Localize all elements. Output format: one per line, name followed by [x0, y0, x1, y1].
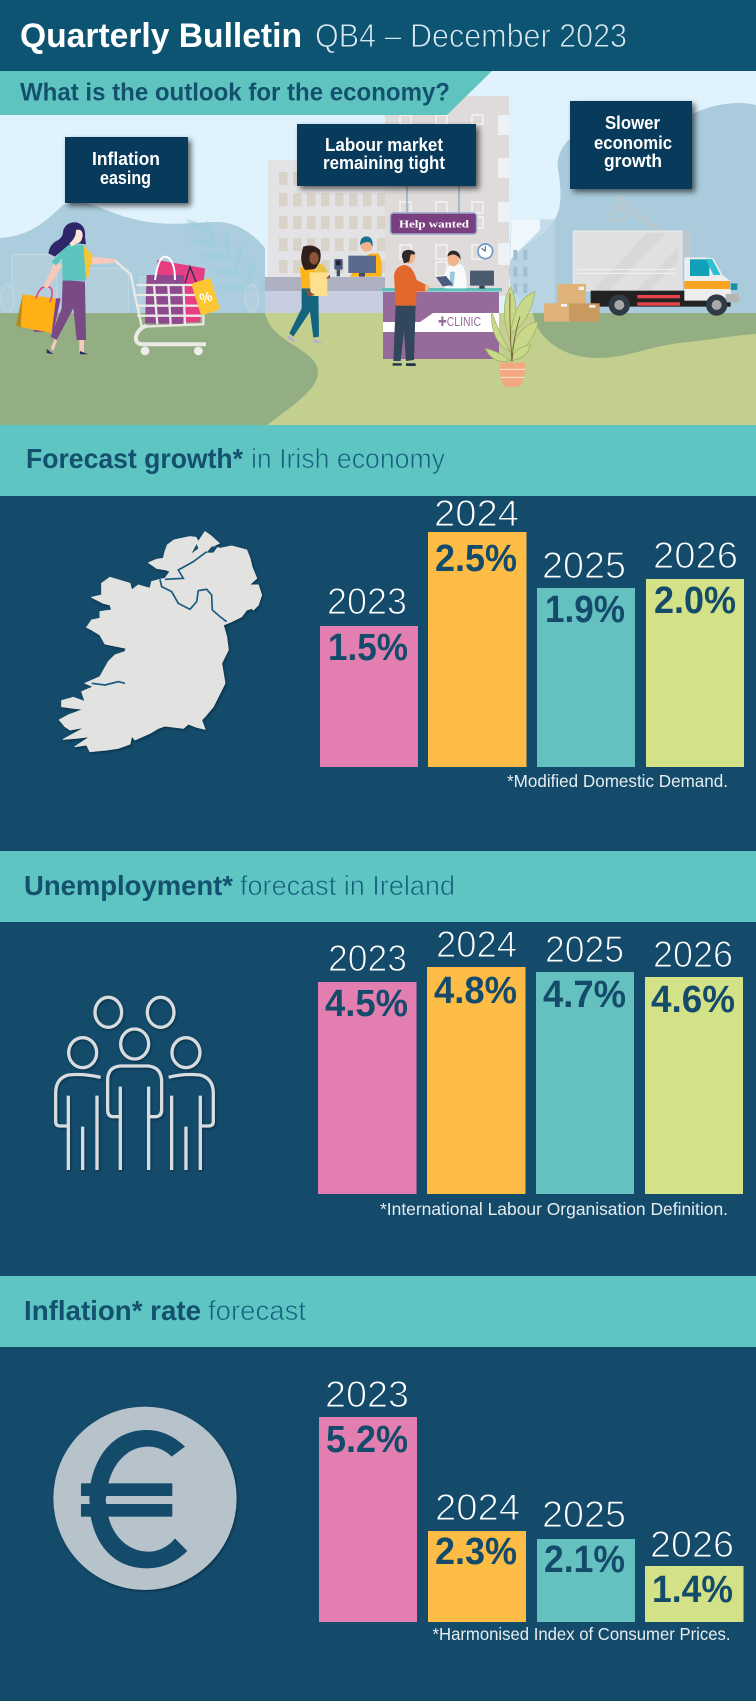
bar 2025 — [536, 929, 634, 1194]
icon: map of Ireland — [59, 532, 262, 752]
crane — [612, 195, 660, 231]
doctor and screen — [436, 244, 494, 289]
bar 2024 — [427, 924, 526, 1194]
bar chart: inflation — [319, 1374, 744, 1622]
bar 2024: 2.5% — [435, 538, 517, 580]
shopping trolley — [115, 257, 220, 355]
callout: inflation easing: Inflation — [92, 148, 160, 169]
help wanted sign: Help wanted — [399, 220, 469, 230]
bar 2024 — [428, 1487, 526, 1622]
callout: inflation easing — [65, 137, 188, 203]
woman with grocery bag — [287, 246, 330, 343]
help wanted sign — [390, 213, 476, 234]
background building left — [268, 160, 385, 285]
faint building right — [510, 219, 555, 313]
section heading — [0, 851, 756, 922]
section heading: in Irish economy — [251, 443, 445, 474]
bar chart: unemployment — [318, 924, 743, 1194]
shop counter — [258, 277, 385, 339]
bar 2026: 2026 — [653, 535, 738, 576]
footnote: *Modified Domestic Demand. — [507, 771, 728, 791]
bar 2023: 2023 — [327, 581, 407, 622]
man at clinic — [393, 250, 430, 366]
bar 2025 — [537, 545, 635, 767]
section heading: forecast in Ireland — [240, 870, 455, 901]
callout: slower growth: economic — [594, 132, 672, 153]
bar 2023: 2023 — [328, 938, 407, 979]
bar 2026: 2026 — [653, 934, 733, 975]
bar 2025: 1.9% — [545, 589, 625, 631]
subtitle: QB4 – December 2023 — [315, 17, 627, 54]
footnote: *International Labour Organisation Definition. — [380, 1199, 728, 1219]
bar 2025: 2025 — [542, 1494, 626, 1535]
section heading — [0, 1276, 756, 1347]
section heading — [0, 425, 756, 496]
section heading: Unemployment* — [24, 870, 233, 901]
woman shopper — [16, 222, 115, 354]
bar 2023 — [319, 1374, 417, 1622]
bar 2023 — [318, 938, 416, 1194]
hanging wires — [407, 186, 459, 213]
bar 2023: 1.5% — [328, 627, 408, 669]
icon: euro coin — [53, 1407, 237, 1590]
bar 2025: 2.1% — [544, 1539, 625, 1581]
bar 2026 — [645, 1524, 744, 1622]
bar 2024: 2.3% — [435, 1531, 517, 1573]
section heading: Forecast growth* — [26, 443, 243, 474]
clinic sign text: ✚CLINIC — [438, 314, 481, 329]
clinic reception desk — [382, 288, 502, 359]
potted plant — [485, 287, 538, 387]
panel: forecast growth — [0, 425, 756, 791]
panel: header — [0, 0, 756, 71]
outlook banner — [0, 71, 492, 115]
callout: slower growth — [570, 101, 692, 189]
bar 2023: 4.5% — [325, 983, 408, 1025]
bar 2026: 1.4% — [652, 1569, 733, 1611]
bar 2024: 2024 — [436, 924, 517, 965]
callout: labour market: remaining tight — [323, 152, 445, 173]
discount tag: % — [198, 288, 215, 307]
footnote: *Harmonised Index of Consumer Prices. — [432, 1624, 730, 1644]
bar 2026: 2026 — [650, 1524, 734, 1565]
bar 2023: 5.2% — [326, 1419, 408, 1461]
bar 2026 — [645, 934, 743, 1194]
section heading: Inflation* rate — [24, 1295, 201, 1326]
clock — [478, 244, 493, 259]
panel: inflation — [0, 1276, 756, 1644]
shop assistant — [334, 236, 382, 277]
grass — [0, 313, 756, 425]
bar 2023 — [320, 581, 418, 767]
faint city skyline left — [1, 254, 258, 313]
tall building — [385, 96, 509, 296]
bar chart: growth — [320, 493, 744, 767]
panel: unemployment — [0, 851, 756, 1219]
cardboard boxes — [544, 284, 600, 322]
bar 2024: 4.8% — [434, 970, 517, 1012]
shopping bags held — [16, 286, 61, 333]
banner heading: What is the outlook for the economy? — [20, 78, 450, 106]
bar 2025 — [537, 1494, 635, 1622]
bar 2024: 2024 — [435, 1487, 520, 1528]
dark green ground right — [533, 313, 756, 358]
bar 2026: 2.0% — [654, 580, 736, 622]
right hill — [509, 103, 756, 313]
bags in trolley — [145, 257, 205, 324]
bar 2023: 2023 — [325, 1374, 409, 1415]
callout: inflation easing: easing — [100, 167, 151, 188]
callout: slower growth: growth — [604, 150, 662, 171]
title: Quarterly Bulletin — [20, 17, 302, 55]
section heading: forecast — [208, 1295, 306, 1326]
bar 2025: 2025 — [542, 545, 626, 586]
icon: group of people — [56, 997, 213, 1170]
bar 2024: 2024 — [434, 493, 519, 534]
bar 2025: 2025 — [545, 929, 624, 970]
callout: labour market: Labour market — [325, 134, 443, 155]
dark green ground left — [0, 313, 318, 425]
delivery truck — [573, 231, 739, 316]
callout: slower growth: Slower — [605, 112, 660, 133]
bar 2026 — [646, 535, 744, 767]
callout: labour market — [297, 124, 476, 186]
bar 2026: 4.6% — [651, 979, 735, 1021]
faint leaves — [186, 219, 256, 291]
bar 2024 — [428, 493, 526, 767]
bar 2025: 4.7% — [543, 974, 626, 1016]
panel: economy outlook illustration — [0, 71, 756, 425]
left hill — [0, 202, 265, 313]
